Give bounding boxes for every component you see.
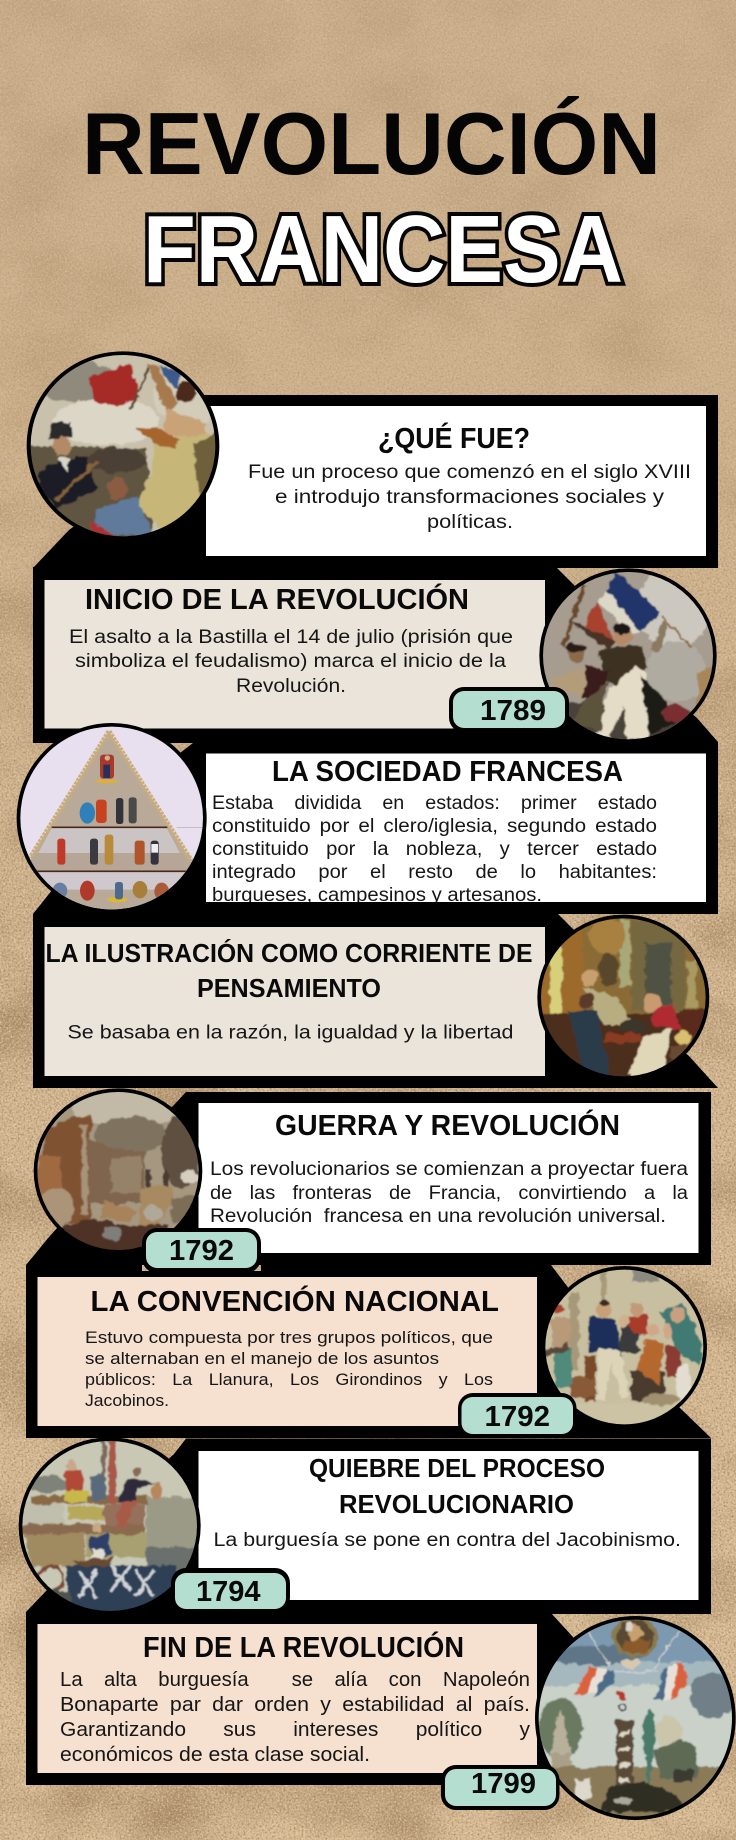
panel backing	[26, 1265, 711, 1438]
body text	[85, 1329, 493, 1410]
panel: quiebre del proceso revolucionario	[14, 1434, 711, 1618]
image: national convention scene	[545, 1266, 707, 1424]
image: Liberty leading the people	[26, 351, 220, 536]
body text: burgueses, campesinos y artesanos.	[212, 885, 542, 906]
panel backing	[26, 1092, 711, 1265]
body text: públicos: La Llanura, Los Girondinos y Los	[85, 1371, 493, 1389]
text box	[198, 1451, 698, 1600]
text box	[206, 754, 706, 902]
body text: Los revolucionarios se comienzan a proyectar fuera	[210, 1159, 688, 1180]
heading: REVOLUCIONARIO	[339, 1489, 574, 1519]
body text: Revolución.	[236, 676, 346, 697]
body text: Estaba dividida en estados: primer estado	[212, 793, 657, 814]
panel backing	[33, 914, 718, 1088]
heading: PENSAMIENTO	[197, 973, 381, 1003]
date badge 1792	[142, 1228, 261, 1273]
panel: la sociedad francesa	[10, 718, 718, 918]
date badge 1799	[441, 1765, 560, 1810]
panel: guerra y revolución	[26, 1085, 711, 1273]
body text: Garantizando sus intereses político y	[60, 1719, 530, 1741]
body text: El asalto a la Bastilla el 14 de julio (prisión que	[69, 627, 513, 648]
body text: Bonaparte par dar orden y estabilidad al país.	[60, 1694, 530, 1716]
body text: La alta burguesía se alía con Napoleón	[60, 1669, 530, 1691]
body text: La burguesía se pone en contra del Jacobinismo.	[214, 1530, 681, 1551]
heading: ¿QUÉ FUE?	[378, 421, 530, 455]
body text: se alternaban en el manejo de los asuntos	[85, 1350, 439, 1368]
date badge 1792: 1792	[169, 1235, 234, 1267]
panel: la ilustración	[33, 910, 720, 1088]
date badge 1794: 1794	[196, 1576, 260, 1608]
panel: la convención nacional	[26, 1262, 716, 1438]
date badge 1792	[458, 1393, 576, 1438]
body text: de las fronteras de Francia, convirtiendo a la	[210, 1183, 688, 1204]
heading: LA SOCIEDAD FRANCESA	[272, 756, 623, 788]
date badge 1789: 1789	[480, 695, 546, 727]
heading: INICIO DE LA REVOLUCIÓN	[85, 582, 469, 616]
image: battle with tricolour flag	[539, 568, 717, 740]
body text	[69, 627, 513, 697]
body text	[248, 462, 691, 533]
panel backing	[33, 567, 718, 743]
text box	[198, 1103, 698, 1253]
body text: constituido por la nobleza, y tercer estado	[212, 839, 657, 860]
panel: qué fue	[20, 345, 718, 568]
body text: Estuvo compuesta por tres grupos políticos, que	[85, 1329, 493, 1347]
text box	[206, 406, 706, 556]
image: salon scene	[537, 914, 710, 1076]
body text: políticas.	[427, 512, 513, 533]
date badge 1789	[449, 687, 569, 732]
body text: e introdujo transformaciones sociales y	[275, 487, 665, 508]
panel: inicio de la revolución	[33, 565, 730, 752]
panel backing	[33, 743, 718, 914]
image: allegory with tricolour flags	[530, 1612, 736, 1825]
body text: integrado por el resto de lo habitantes:	[212, 862, 657, 883]
text box	[44, 927, 545, 1076]
body text: Jacobinos.	[85, 1392, 169, 1410]
text box	[38, 1624, 537, 1773]
body text: Revolución francesa en una revolución universal.	[210, 1206, 666, 1227]
text box	[44, 580, 545, 728]
title line: FRANCESA: FRANCESA	[143, 196, 623, 303]
title	[82, 94, 661, 303]
body text	[60, 1669, 530, 1766]
heading	[46, 938, 532, 1003]
panel backing	[33, 395, 718, 568]
image: social pyramid	[16, 723, 207, 910]
heading: LA CONVENCIÓN NACIONAL	[90, 1284, 499, 1318]
body text: económicos de esta clase social.	[60, 1744, 370, 1766]
text box	[38, 1277, 537, 1426]
body text: Fue un proceso que comenzó en el siglo XVIII	[248, 462, 691, 483]
heading: GUERRA Y REVOLUCIÓN	[275, 1108, 620, 1142]
panel backing	[26, 1613, 640, 1785]
image: guillotine execution	[18, 1438, 201, 1611]
body text: simboliza el feudalismo) marca el inicio de la	[75, 651, 506, 672]
body text	[210, 1159, 688, 1227]
date badge 1794	[171, 1568, 290, 1613]
panel backing	[26, 1438, 711, 1614]
heading: FIN DE LA REVOLUCIÓN	[143, 1630, 464, 1664]
image: storming of the Bastille	[34, 1088, 202, 1250]
heading: LA ILUSTRACIÓN COMO CORRIENTE DE	[46, 938, 532, 968]
heading	[309, 1453, 605, 1519]
heading: QUIEBRE DEL PROCESO	[309, 1453, 605, 1483]
title line: REVOLUCIÓN: REVOLUCIÓN	[82, 94, 661, 193]
body text: constituido por el clero/iglesia, segundo estado	[212, 816, 657, 837]
body text	[212, 793, 657, 906]
date badge 1792: 1792	[484, 1401, 550, 1433]
body text: Se basaba en la razón, la igualdad y la libertad	[68, 1022, 514, 1044]
panel: fin de la revolución	[26, 1612, 736, 1825]
date badge 1799: 1799	[471, 1768, 536, 1800]
